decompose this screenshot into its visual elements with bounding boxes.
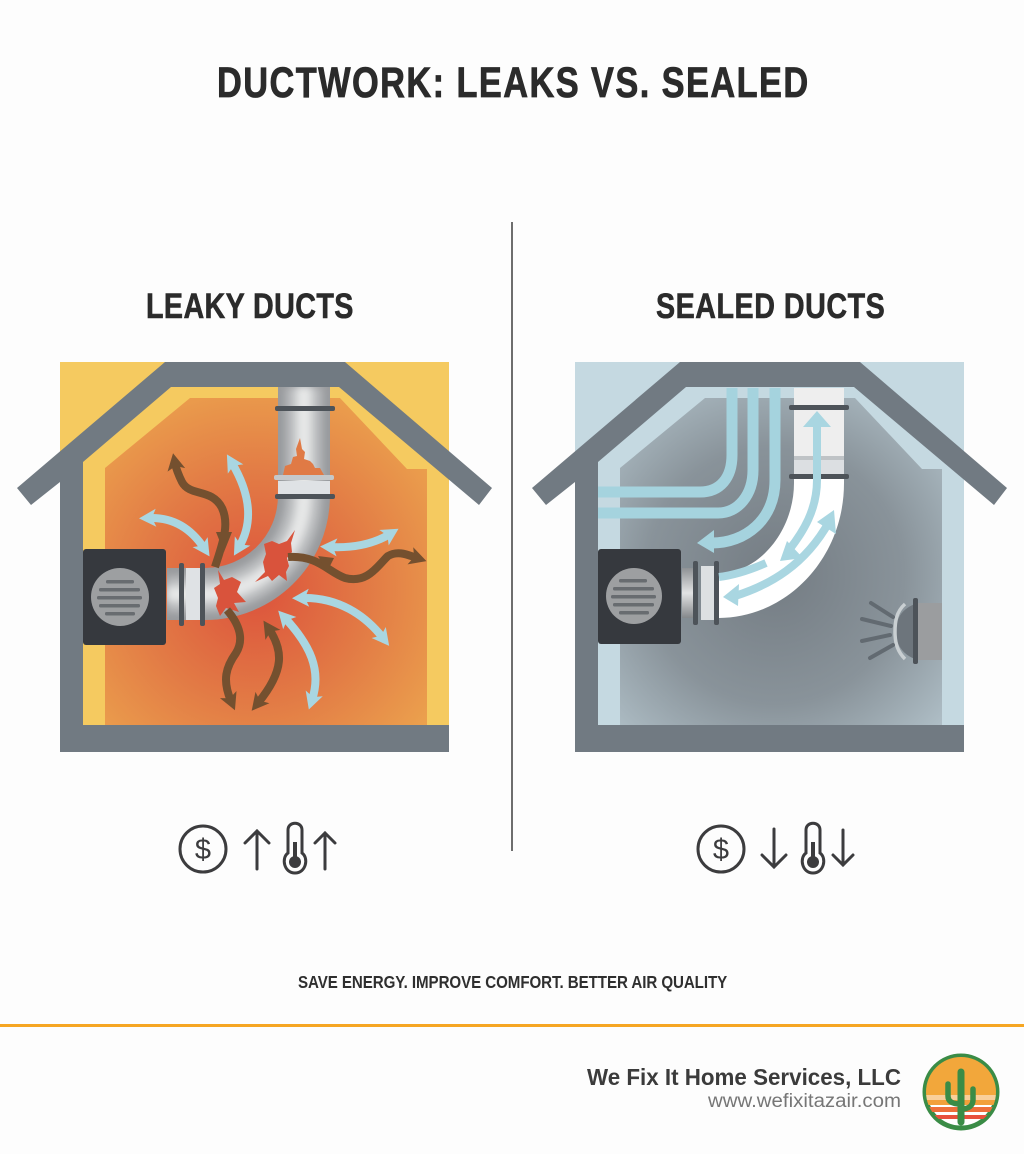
icon: dollar coin [698, 826, 744, 872]
company website: www.wefixitazair.com [707, 1091, 901, 1112]
tagline: SAVE ENERGY. IMPROVE COMFORT. BETTER AIR QUALITY [298, 972, 727, 992]
clamp bands [693, 561, 698, 625]
panel: sealed ducts [532, 286, 1007, 752]
icon: cost down arrow [762, 829, 786, 867]
duct fitting [186, 568, 202, 620]
logo [925, 1056, 997, 1128]
house outline [17, 362, 492, 752]
dust arrows: dirty air entering [175, 463, 417, 703]
title: DUCTWORK: LEAKS VS. SEALED [217, 59, 808, 107]
icon: temperature down arrow [833, 830, 853, 865]
icon: thermometer [802, 823, 824, 873]
cost and temperature icons: leaky [180, 823, 335, 873]
icon: dollar coin: $ [195, 834, 211, 866]
supply air lines [598, 388, 775, 543]
tear: lower [214, 570, 246, 616]
heading: sealed ducts: SEALED DUCTS [656, 286, 885, 326]
arrowhead: supply air [697, 530, 714, 553]
house outline [532, 362, 1007, 752]
leaking duct [167, 387, 335, 626]
icon: thermometer [284, 823, 306, 873]
heading: leaky ducts: LEAKY DUCTS [146, 286, 353, 326]
insulation background [575, 362, 964, 752]
tear: top [283, 438, 324, 475]
blower unit [83, 549, 166, 645]
arrowheads inside duct [723, 411, 836, 606]
tear: middle [255, 530, 295, 582]
insulation background [60, 362, 449, 752]
cool interior [620, 398, 942, 725]
footer rule [0, 1024, 1024, 1027]
sealed duct [682, 388, 849, 625]
icon: temperature up arrow [315, 833, 335, 869]
supply vent with airflow rays [862, 598, 942, 664]
icon: dollar coin: $ [713, 834, 729, 866]
heated interior [105, 398, 427, 725]
arrowheads on dust paths [216, 532, 334, 572]
center divider [511, 222, 513, 851]
icon: cost up arrow [245, 831, 269, 869]
company name: We Fix It Home Services, LLC [587, 1064, 901, 1090]
blower unit [598, 549, 681, 644]
clamp bands [179, 563, 184, 626]
cost and temperature icons: sealed [698, 823, 853, 873]
airflow arrows inside duct [719, 425, 829, 596]
panel: leaky ducts [17, 286, 492, 752]
air arrows: conditioned air escaping [149, 463, 390, 700]
icon: dollar coin [180, 826, 226, 872]
